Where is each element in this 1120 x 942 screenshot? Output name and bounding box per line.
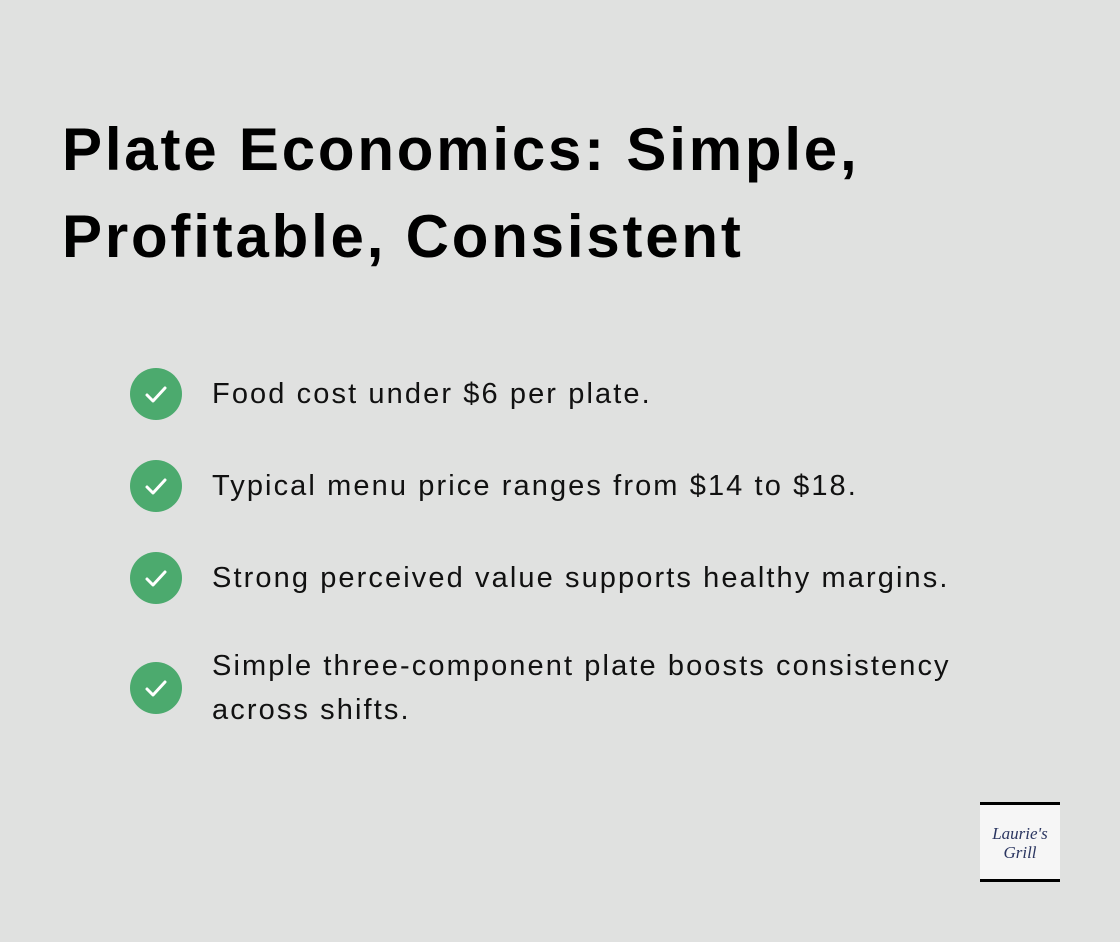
- item 3: [130, 552, 950, 604]
- icon: check: [130, 662, 182, 714]
- item 4: across shifts.: [212, 694, 411, 726]
- item 1: Food cost under $6 per plate.: [212, 378, 652, 410]
- item 1: [130, 368, 652, 420]
- logo: Laurie's: [992, 824, 1048, 843]
- icon: check: [130, 552, 182, 604]
- title: [62, 116, 859, 270]
- item 3: Strong perceived value supports healthy margins.: [212, 562, 950, 594]
- item 4: [130, 650, 951, 726]
- logo: [980, 802, 1060, 882]
- logo: Grill: [1003, 843, 1037, 862]
- title: Profitable, Consistent: [62, 203, 744, 270]
- icon: check: [130, 460, 182, 512]
- item 2: [130, 460, 858, 512]
- title: Plate Economics: Simple,: [62, 116, 859, 183]
- item 4: Simple three-component plate boosts consistency: [212, 650, 951, 682]
- icon: check: [130, 368, 182, 420]
- item 2: Typical menu price ranges from $14 to $18.: [212, 470, 858, 502]
